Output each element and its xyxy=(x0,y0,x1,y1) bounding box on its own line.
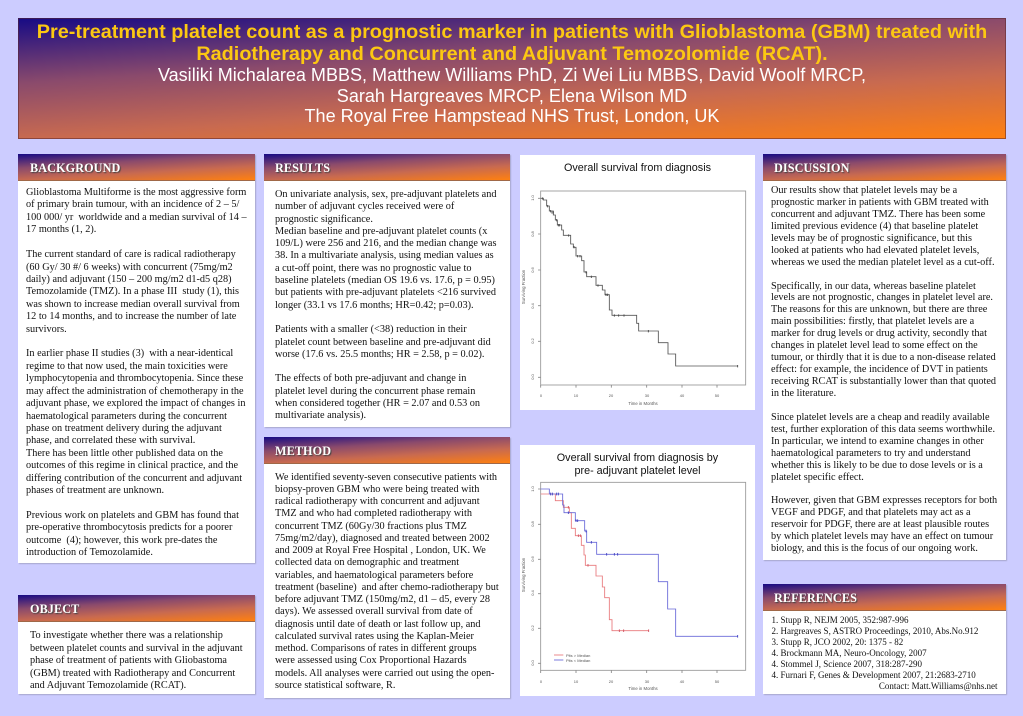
kaplan-meier chart by group: 30 xyxy=(645,679,650,684)
kaplan-meier chart by group: 0.0 xyxy=(530,659,535,666)
kaplan-meier chart by group: Surviving Fraction xyxy=(521,557,526,592)
text: reference list: 1. Stupp R, NEJM 2005, 352:987-996 2. Hargreaves S, ASTRO Proceedings, 2010, Abs.No.912 3. Stupp R, JCO 2002, 20: 1375 - 82 4. Brockmann MA, Neuro-Oncology, 2007 4. Stommel J, Science 2007, 318:287-290 4. Furnari F, Genes & Development 2007, 21:2683-2710 xyxy=(772,615,978,680)
heading: references: REFERENCES xyxy=(774,591,857,605)
chart heading: Overall survival from diagnosis by xyxy=(557,452,718,464)
kaplan-meier chart: 30 xyxy=(645,393,650,398)
kaplan-meier chart xyxy=(521,190,746,406)
heading: object: OBJECT xyxy=(30,602,79,616)
kaplan-meier chart: 0.0 xyxy=(530,373,535,380)
kaplan-meier chart: 0.8 xyxy=(530,230,535,237)
poster title: Pre-treatment platelet count as a prognostic marker in patients with Glioblastoma (GBM) treated with xyxy=(37,21,987,43)
panel: background xyxy=(18,154,255,563)
kaplan-meier chart by group: 20 xyxy=(609,679,614,684)
kaplan-meier chart by group: Plts < Median xyxy=(566,658,590,663)
kaplan-meier chart by group: 0.8 xyxy=(530,520,535,527)
poster title xyxy=(37,21,987,65)
chart heading: pre- adjuvant platelet level xyxy=(574,465,701,477)
poster title: Radiotherapy and Concurrent and Adjuvant Temozolomide (RCAT). xyxy=(196,43,828,65)
panel: references xyxy=(763,584,1006,694)
kaplan-meier chart by group: Time in Months xyxy=(628,686,658,691)
kaplan-meier chart by group: 1.0 xyxy=(530,485,535,492)
kaplan-meier chart: 0.2 xyxy=(530,337,535,344)
authors and institution: Vasiliki Michalarea MBBS, Matthew Williams PhD, Zi Wei Liu MBBS, David Woolf MRCP, xyxy=(158,65,866,85)
text: discussion: Our results show that platelet levels may be a prognostic marker in patients with GBM treated with concurrent and adjuvant TMZ. There has been some limited previous evidence (4) that baseline platelet levels may be of prognostic significance, but this looked at patients who had elevated platelet levels, whereas we used the median platelet level as a cut-off. Specifically, in our data, whereas baseline platelet levels are not prognostic, changes in platelet level are. The reasons for this are unknown, but there are three main possibilities: firstly, that platelet levels are a marker for drug levels or drug activity, secondly that changes in platelet level lead to some effect on the tumour, or thirdly that it is due to a non-disease related effect: for example, the incidence of DVT in patients receiving RCAT is substantially lower than that quoted in the literature. Since platelet levels are a cheap and readily available test, further exploration of this data seems worthwhile. In particular, we intend to examine changes in other haematological parameters to try and understand whether this is likely to be due to dose levels or is a platelet specific effect. However, given that GBM expresses receptors for both VEGF and PDGF, and that platelets may act as a reservoir for PDGF, there are at least plausible routes by which platelet levels may have an effect on tumour biology, and this is the focus of our ongoing work. xyxy=(771,185,997,554)
panel: survival chart overall xyxy=(520,155,755,410)
kaplan-meier chart by group: 0.2 xyxy=(530,624,535,631)
chart heading: Overall survival from diagnosis xyxy=(564,162,711,174)
panel: survival chart by platelet level xyxy=(520,445,755,696)
text: reference list: Contact: Matt.Williams@nhs.net xyxy=(879,681,998,691)
kaplan-meier chart: 1.0 xyxy=(530,194,535,201)
kaplan-meier chart: Surviving Fraction xyxy=(521,269,526,304)
kaplan-meier chart by group: Plts > Median xyxy=(566,653,590,658)
panel: object xyxy=(18,595,255,694)
text: object: To investigate whether there was a relationship between platelet counts and survival in the adjuvant phase of treatment of patients with Gliobastoma (GBM) treated with Radiotherapy and Concurrent and Adjuvant Temozolamide (RCAT). xyxy=(30,630,243,691)
kaplan-meier chart: Time in Months xyxy=(628,401,658,406)
heading: references xyxy=(763,584,1006,611)
title banner xyxy=(18,18,1006,139)
kaplan-meier chart by group: 40 xyxy=(680,679,685,684)
kaplan-meier chart by group xyxy=(521,482,746,691)
kaplan-meier chart: 0 xyxy=(540,393,543,398)
kaplan-meier chart by group: 50 xyxy=(715,679,720,684)
kaplan-meier chart by group: 0 xyxy=(540,679,543,684)
heading: background: BACKGROUND xyxy=(30,161,120,175)
heading: background xyxy=(18,154,255,181)
kaplan-meier chart by group: 0.6 xyxy=(530,555,535,562)
kaplan-meier chart: 0.6 xyxy=(530,266,535,273)
text: method: We identified seventy-seven consecutive patients with biopsy-proven GBM who were being treated with radical radiotherapy with concurrent and adjuvant TMZ and who had completed radiotherapy with concurrent TMZ (60Gy/30 fractions plus TMZ 75mg/m2/day), diagnosed and treated between 2002 and 2009 at Royal Free Hospital , London, UK. We collected data on demographic and treatment variables, and haematological parameters before treatment (baseline) and after chemo-radiotherapy but before adjuvant TMZ (150mg/m2, d1 – d5, every 28 days). We assessed overall survival from date of diagnosis until date of death or last follow up, and calculated survival rates using the Kaplan-Meier method. Comparisons of rates in different groups were assessed using Cox Proportional Hazards models. All analyses were carried out using the open- source statistical software, R. xyxy=(275,472,499,691)
heading: object xyxy=(18,595,255,622)
chart heading xyxy=(557,452,718,477)
heading: results xyxy=(264,154,510,181)
heading: results: RESULTS xyxy=(275,161,330,175)
kaplan-meier chart by group: 0.4 xyxy=(530,589,535,596)
authors and institution: The Royal Free Hampstead NHS Trust, London, UK xyxy=(305,106,719,126)
kaplan-meier chart: 50 xyxy=(715,393,720,398)
kaplan-meier chart: 20 xyxy=(609,393,614,398)
kaplan-meier chart by group: 10 xyxy=(574,679,579,684)
text: results: On univariate analysis, sex, pre-adjuvant platelets and number of adjuvant cycles received were of prognostic significance. Median baseline and pre-adjuvant platelet counts (x 109/L) were 256 and 216, and the median change was 38. In a multivariate analysis, using median values as a cut-off point, there was no prognostic value to baseline platelets (median OS 19.6 vs. 17.6, p = 0.95) but patients with pre-adjuvant platelets <216 survived longer (33.1 vs 17.6 months; HR=0.42; p=0.03). Patients with a smaller (<38) reduction in their platelet count between baseline and pre-adjuvant did worse (17.6 vs. 25.5 months; HR = 2.58, p = 0.02). The effects of both pre-adjuvant and change in platelet level during the concurrent phase remain when considered together (HR = 2.07 and 0.53 on multivariate analysis). xyxy=(275,189,496,421)
heading: method: METHOD xyxy=(275,444,331,458)
kaplan-meier chart: 10 xyxy=(574,393,579,398)
text: background: Glioblastoma Multiforme is the most aggressive form of primary brain tumour, with an incidence of 2 – 5/ 100 000/ yr worldwide and a median survival of 14 – 17 months (1, 2). The current standard of care is radical radiotherapy (60 Gy/ 30 #/ 6 weeks) with concurrent (75mg/m2 daily) and adjuvant (150 – 200 mg/m2 d1-d5 q28) Temozolamide (TMZ). In a phase III study (1), this was shown to increase median overall survival from 12 to 14 months, and to increase the number of late survivors. In earlier phase II studies (3) with a near-identical regime to that now used, the main toxicities were lymphocytopenia and thrombocytopenia. Since these may affect the administration of chemotherapy in the adjuvant phase, we explored the impact of changes in haematological parameters during the concurrent phase on treatment delivery during the adjuvant phase, and correlated these with survival. There has been little other published data on the outcomes of this regime in clinical practice, and the differing contribution of the concurrent and adjuvant phases of treatment are unknown. Previous work on platelets and GBM has found that pre-operative thrombocytosis predicts for a poorer outcome (4); however, this work pre-dates the introduction of Temozolamide. xyxy=(26,187,247,558)
kaplan-meier chart: 40 xyxy=(680,393,685,398)
kaplan-meier chart: 0.4 xyxy=(530,302,535,309)
heading: discussion xyxy=(763,154,1006,181)
panel: method xyxy=(264,437,510,698)
heading: method xyxy=(264,437,510,464)
panel: results xyxy=(264,154,510,427)
authors and institution xyxy=(158,65,866,126)
panel: discussion xyxy=(763,154,1006,560)
authors and institution: Sarah Hargreaves MRCP, Elena Wilson MD xyxy=(337,86,687,106)
heading: discussion: DISCUSSION xyxy=(774,161,850,175)
